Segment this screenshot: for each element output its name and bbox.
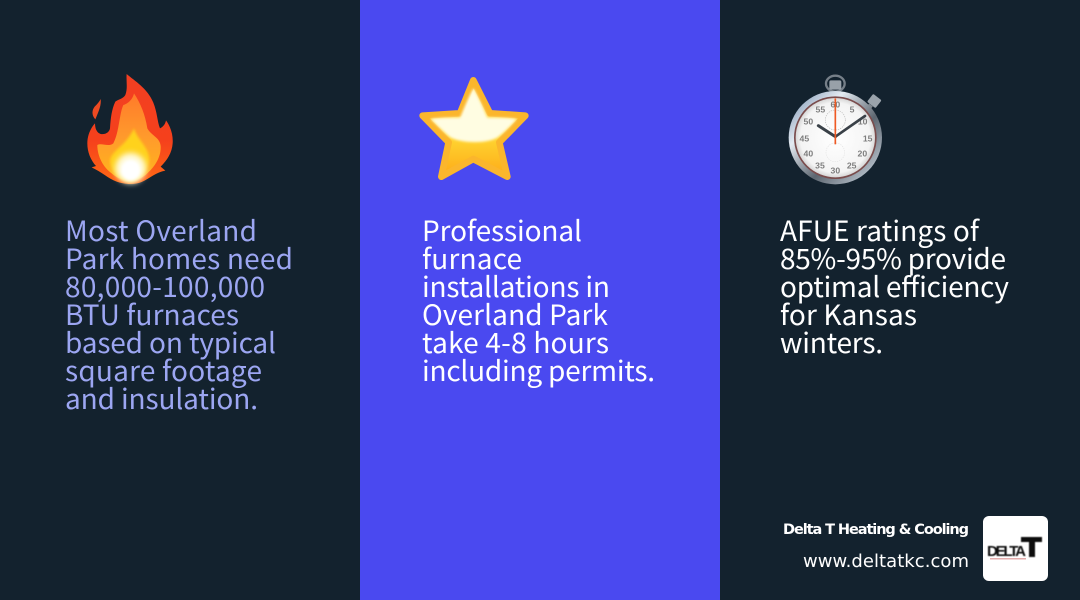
footer: website: www.deltatkc.com: [803, 551, 969, 572]
text: installation fact: furnace: [422, 238, 522, 278]
text: BTU sizing fact: based on typical: [65, 322, 276, 362]
text: AFUE fact: [780, 210, 1009, 362]
logo: Delta T: DELTA: [987, 543, 1026, 560]
text: AFUE fact: AFUE ratings of: [780, 210, 980, 250]
logo: Delta T: [983, 516, 1048, 581]
text: AFUE fact: optimal efficiency: [780, 266, 1009, 306]
panel: installation time: [360, 0, 720, 600]
footer: company name: Delta T Heating & Cooling: [783, 522, 969, 538]
icon: stopwatch: [789, 76, 882, 184]
icon: stopwatch: 35: [815, 161, 825, 171]
panel: AFUE efficiency: [720, 0, 1080, 600]
icon: stopwatch: 55: [816, 104, 825, 114]
icon: stopwatch: 50: [804, 116, 813, 126]
text: AFUE fact: 85%-95% provide: [780, 238, 1006, 278]
text: installation fact: installations in: [422, 266, 610, 306]
icon: stopwatch: 20: [858, 149, 867, 159]
text: AFUE fact: winters.: [780, 322, 883, 362]
text: installation fact: take 4-8 hours: [422, 322, 609, 362]
icon: stopwatch: 5: [850, 104, 855, 114]
text: BTU sizing fact: and insulation.: [65, 378, 258, 418]
icon: stopwatch: 40: [804, 149, 813, 159]
text: installation fact: including permits.: [422, 350, 655, 390]
text: BTU sizing fact: Park homes need: [65, 238, 293, 278]
icon: stopwatch: 60: [831, 100, 840, 110]
icon: stopwatch: 30: [831, 166, 840, 176]
text: installation fact: Overland Park: [422, 294, 609, 334]
text: BTU sizing fact: [65, 210, 293, 418]
text: BTU sizing fact: Most Overland: [65, 210, 257, 250]
icon: star: [423, 80, 525, 177]
icon: fire: [87, 74, 173, 184]
text: BTU sizing fact: BTU furnaces: [65, 294, 239, 334]
panel: BTU sizing: [0, 0, 360, 600]
icon: stopwatch: 45: [800, 133, 809, 143]
text: installation fact: [422, 210, 655, 390]
text: BTU sizing fact: 80,000-100,000: [65, 266, 265, 306]
text: AFUE fact: for Kansas: [780, 294, 917, 334]
text: installation fact: Professional: [422, 210, 582, 250]
icon: stopwatch: 25: [847, 161, 857, 171]
icon: stopwatch: 10: [858, 117, 868, 127]
text: BTU sizing fact: square footage: [65, 350, 262, 390]
icon: stopwatch: 15: [863, 133, 873, 143]
